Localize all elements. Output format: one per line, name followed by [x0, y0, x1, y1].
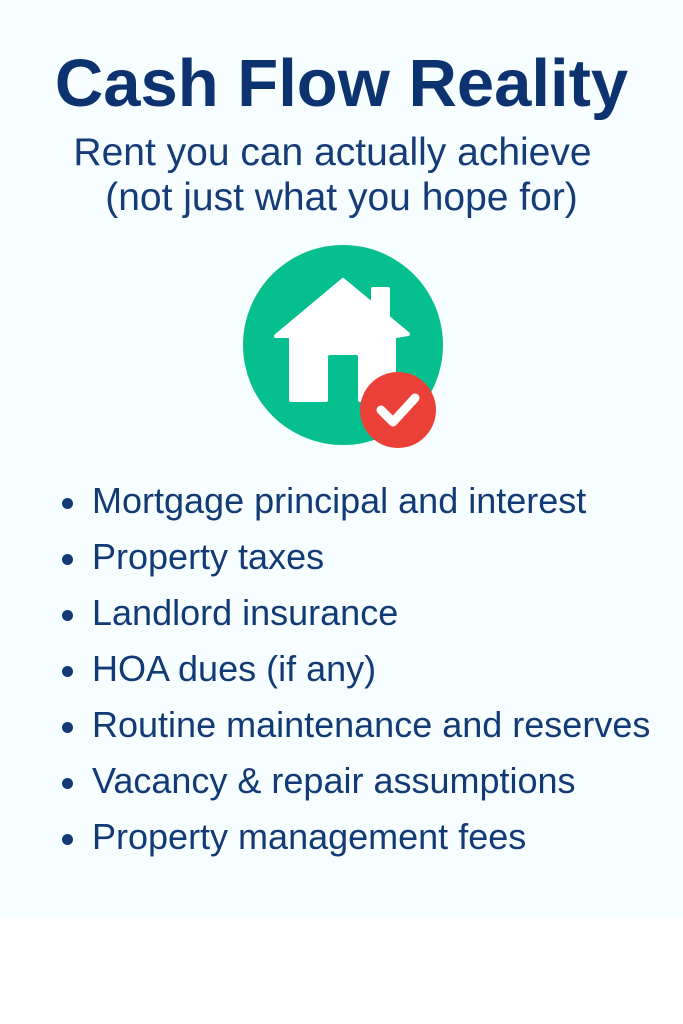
bullet list: HOA dues (if any) — [92, 648, 376, 689]
bullet list: Mortgage principal and interest — [92, 480, 586, 521]
subtitle — [73, 131, 592, 219]
subtitle: Rent you can actually achieve — [73, 131, 592, 174]
bullet list: Landlord insurance — [92, 592, 398, 633]
bullet list: Property management fees — [92, 816, 526, 857]
bullet list — [62, 480, 650, 857]
icon: house with check — [243, 245, 443, 448]
title: Cash Flow Reality — [55, 46, 628, 121]
subtitle: (not just what you hope for) — [105, 176, 578, 219]
bullet list: Property taxes — [92, 536, 324, 577]
bullet list: Routine maintenance and reserves — [92, 704, 650, 745]
bullet list: Vacancy & repair assumptions — [92, 760, 576, 801]
